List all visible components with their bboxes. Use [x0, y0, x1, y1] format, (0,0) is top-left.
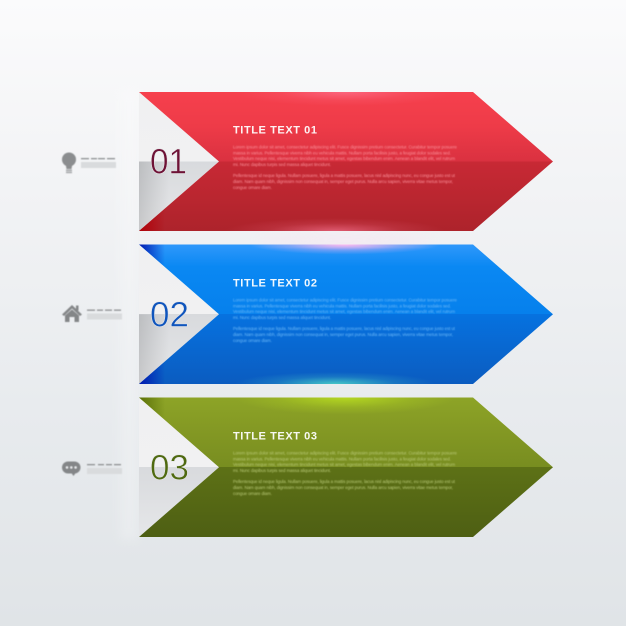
body text 01: mi. Nunc dapibus turpis sed massa aliquet tincidunt. [233, 162, 331, 167]
body text 02: mi. Nunc dapibus turpis sed massa aliquet tincidunt. [233, 315, 331, 320]
body text 03: Vestibulum neque nisi, elementum tincidunt metus sit amet, egestas bibendum enim. Aenean a blandit elit, vel rutrum [233, 462, 455, 467]
number 03: 03 [150, 448, 189, 488]
label dashes 3 [87, 464, 122, 474]
body text 02: diam. Nam quam nibh, dignissim non consequat in, semper eget purus. Nulla arcu sapien, viverra vitae metus tempor, [233, 332, 453, 337]
body text 03: Lorem ipsum dolor sit amet, consectetur adipiscing elit. Fusce dignissim pretium consectetur. Curabitur tempor posuere [233, 450, 458, 456]
icon: light bulb [62, 152, 76, 173]
icon: house [62, 305, 82, 322]
panel: arrow 03 [139, 398, 553, 537]
notch triangle 01 [139, 92, 219, 231]
body text 02 [233, 298, 458, 343]
label dashes 1 [81, 158, 116, 168]
body text 02: Lorem ipsum dolor sit amet, consectetur adipiscing elit. Fusce dignissim pretium consectetur. Curabitur tempor posuere [233, 298, 458, 302]
arrow body 03 [139, 398, 553, 537]
body text 03: congue ornare diam. [233, 491, 272, 496]
glow above arrow 02 [255, 234, 435, 246]
body text 01: massa in varius. Pellentesque viverra nibh eu vehicula mattis. Nullam porta facilisis justo, a feugiat dolor sodales sed. [233, 150, 451, 155]
body text 02: massa in varius. Pellentesque viverra nibh eu vehicula mattis. Nullam porta facilisis justo, a feugiat dolor sodales sed. [233, 303, 451, 308]
body text 01: diam. Nam quam nibh, dignissim non consequat in, semper eget purus. Nulla arcu sapien, viverra vitae metus tempor, [233, 179, 453, 184]
body text 02: congue ornare diam. [233, 338, 272, 343]
notch triangle 03 [139, 398, 219, 537]
body text 01: congue ornare diam. [233, 185, 272, 190]
glow highlights 02 [139, 244, 434, 384]
body text 01: Lorem ipsum dolor sit amet, consectetur adipiscing elit. Fusce dignissim pretium consectetur. Curabitur tempor posuere [233, 144, 458, 150]
notch triangle 02 [139, 244, 219, 384]
body text 02: Pellentesque id neque ligula. Nullam posuere, ligula a mattis posuere, lacus nisl adipiscing nunc, eu congue justo est ut [233, 326, 456, 331]
body text 03: diam. Nam quam nibh, dignissim non consequat in, semper eget purus. Nulla arcu sapien, viverra vitae metus tempor, [233, 485, 453, 490]
panel: arrow 02 [139, 244, 553, 384]
body text 01 [233, 144, 458, 190]
side item 1: bulb [62, 152, 116, 173]
body text 03 [233, 450, 458, 496]
body text 03: mi. Nunc dapibus turpis sed massa aliquet tincidunt. [233, 468, 331, 473]
body text 02: Vestibulum neque nisi, elementum tincidunt metus sit amet, egestas bibendum enim. Aenean a blandit elit, vel rutrum [233, 309, 455, 314]
arrow body 01 [139, 92, 553, 231]
title 02: TITLE TEXT 02 [233, 278, 317, 290]
side item 2: home [62, 305, 122, 322]
body text 01: Pellentesque id neque ligula. Nullam posuere, ligula a mattis posuere, lacus nisl adipiscing nunc, eu congue justo est ut [233, 173, 456, 178]
body text 01: Vestibulum neque nisi, elementum tincidunt metus sit amet, egestas bibendum enim. Aenean a blandit elit, vel rutrum [233, 156, 455, 161]
panel: arrow 01 [139, 92, 553, 231]
number 01: 01 [150, 142, 187, 182]
arrow body 02 [139, 244, 553, 384]
title 01: TITLE TEXT 01 [233, 124, 317, 136]
body text 03: Pellentesque id neque ligula. Nullam posuere, ligula a mattis posuere, lacus nisl adipiscing nunc, eu congue justo est ut [233, 479, 456, 484]
body text 03: massa in varius. Pellentesque viverra nibh eu vehicula mattis. Nullam porta facilisis justo, a feugiat dolor sodales sed. [233, 456, 451, 461]
number 02: 02 [150, 296, 189, 334]
glow highlights 03 [139, 398, 429, 416]
side item 3: speech [62, 462, 122, 476]
label dashes 2 [87, 310, 122, 320]
glow highlights 01 [139, 92, 423, 231]
title 03: TITLE TEXT 03 [233, 430, 317, 442]
icon: speech bubble [62, 462, 80, 476]
